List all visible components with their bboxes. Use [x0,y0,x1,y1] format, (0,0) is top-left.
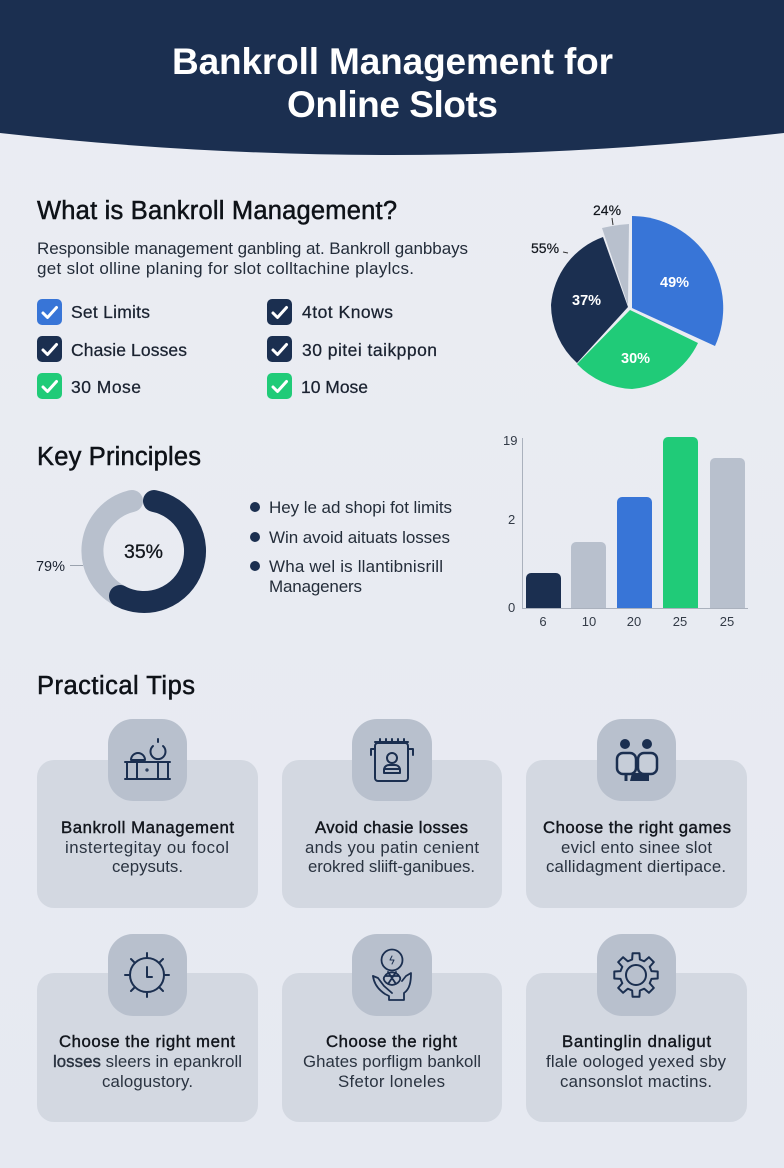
icon: two people [617,739,657,781]
check item: 4tot Knows [267,299,393,325]
description text [37,239,468,278]
title [172,41,613,125]
check item: 4tot Knows: 4tot Knows [302,302,393,322]
bullet list [250,498,452,596]
tip card 3: evicl ento sinee slot [561,838,712,857]
bar chart: 25 [673,614,687,629]
tip card 6: flale oologed yexed sby [546,1052,727,1071]
check item: Chasie Losses: Chasie Losses [71,340,187,360]
tip card 1 [37,719,258,908]
description text: get slot olline planing for slot colltachine playlcs. [37,259,414,278]
icon: pot with person [371,739,413,781]
header banner [0,0,784,155]
bullet 3 [250,557,443,596]
description text: Responsible management ganbling at. Bankroll ganbbays [37,239,468,258]
donut chart: 79% [36,559,65,575]
check item: 30 pitei taikppon: 30 pitei taikppon [302,340,437,360]
check item: 30 Mose: 30 Mose [71,377,141,397]
tip card 5 [282,934,502,1122]
tip card 6 [526,934,747,1122]
pie chart: 49% [660,275,689,291]
heading: Practical Tips [37,672,195,700]
icon: counter and ring [125,739,170,779]
icon: gear [614,953,658,997]
check item: 10 Mose: 10 Mose [301,377,368,397]
tip card 1: Bankroll Management [61,818,234,837]
bar chart: 6 [539,614,547,629]
pie chart: 37% [572,293,601,309]
pie chart: 24% [593,202,621,218]
bar chart: 0 [508,600,515,615]
tip card 3: Choose the right games [543,818,731,837]
tip card 2 [282,719,502,908]
check item: Set Limits: Set Limits [71,302,150,322]
tip card 5: Ghates porfligm bankoll [303,1052,481,1071]
bar chart: 10 [582,614,596,629]
bar chart: 20 [627,614,641,629]
tip card 6: Bantinglin dnaligut [562,1032,711,1051]
donut chart [36,501,195,602]
tip card 2: ands you patin cenient [305,838,479,857]
tip card 4 [37,934,258,1122]
icon: hands holding coin [373,950,411,1000]
icon: clock [125,953,169,997]
title: Online Slots [287,84,498,125]
bar chart: 19 [503,433,517,448]
tip card 5: Sfetor loneles [338,1072,445,1091]
check item: 30 pitei taikppon [267,336,437,362]
tip card 2: erokred sliift-ganibues. [308,857,475,876]
tip card 5: Choose the right [326,1032,457,1051]
check item: Chasie Losses [37,336,187,362]
bar chart: 2 [508,512,515,527]
checklist [37,299,437,399]
tip card 4: Choose the right ment [59,1032,235,1051]
tip card 3 [526,719,747,908]
donut chart: 35% [124,541,163,563]
section: key principles [36,443,452,602]
bullet 2: Win avoid aituats losses [269,528,450,547]
tip card 1: cepysuts. [112,857,183,876]
check item: Set Limits [37,299,150,325]
check item: 10 Mose [267,373,368,399]
bullet 3: Manageners [269,577,362,596]
tip card 4: losses sleers in epankroll [53,1052,242,1071]
bullet 3: Wha wel is llantibnisrill [269,557,443,576]
pie chart: 30% [621,351,650,367]
section: what is bankroll management [37,197,468,399]
tip card 2: Avoid chasie losses [315,818,468,837]
pie chart [531,202,723,389]
check item: 30 Mose [37,373,141,399]
tip card 6: cansonslot mactins. [560,1072,712,1091]
heading: Key Principles [37,443,201,471]
bar chart: 25 [720,614,734,629]
tip card 3: callidagment diertipace. [546,857,726,876]
title: Bankroll Management for [172,41,613,82]
bullet 1: Hey le ad shopi fot limits [269,498,452,517]
section: practical tips [37,672,747,1122]
tip card 1: instertegitay ou focol [65,838,229,857]
pie chart: 55% [531,240,559,256]
tip card 4: calogustory. [102,1072,193,1091]
heading: What is Bankroll Management? [37,197,397,225]
bar chart [503,433,748,629]
